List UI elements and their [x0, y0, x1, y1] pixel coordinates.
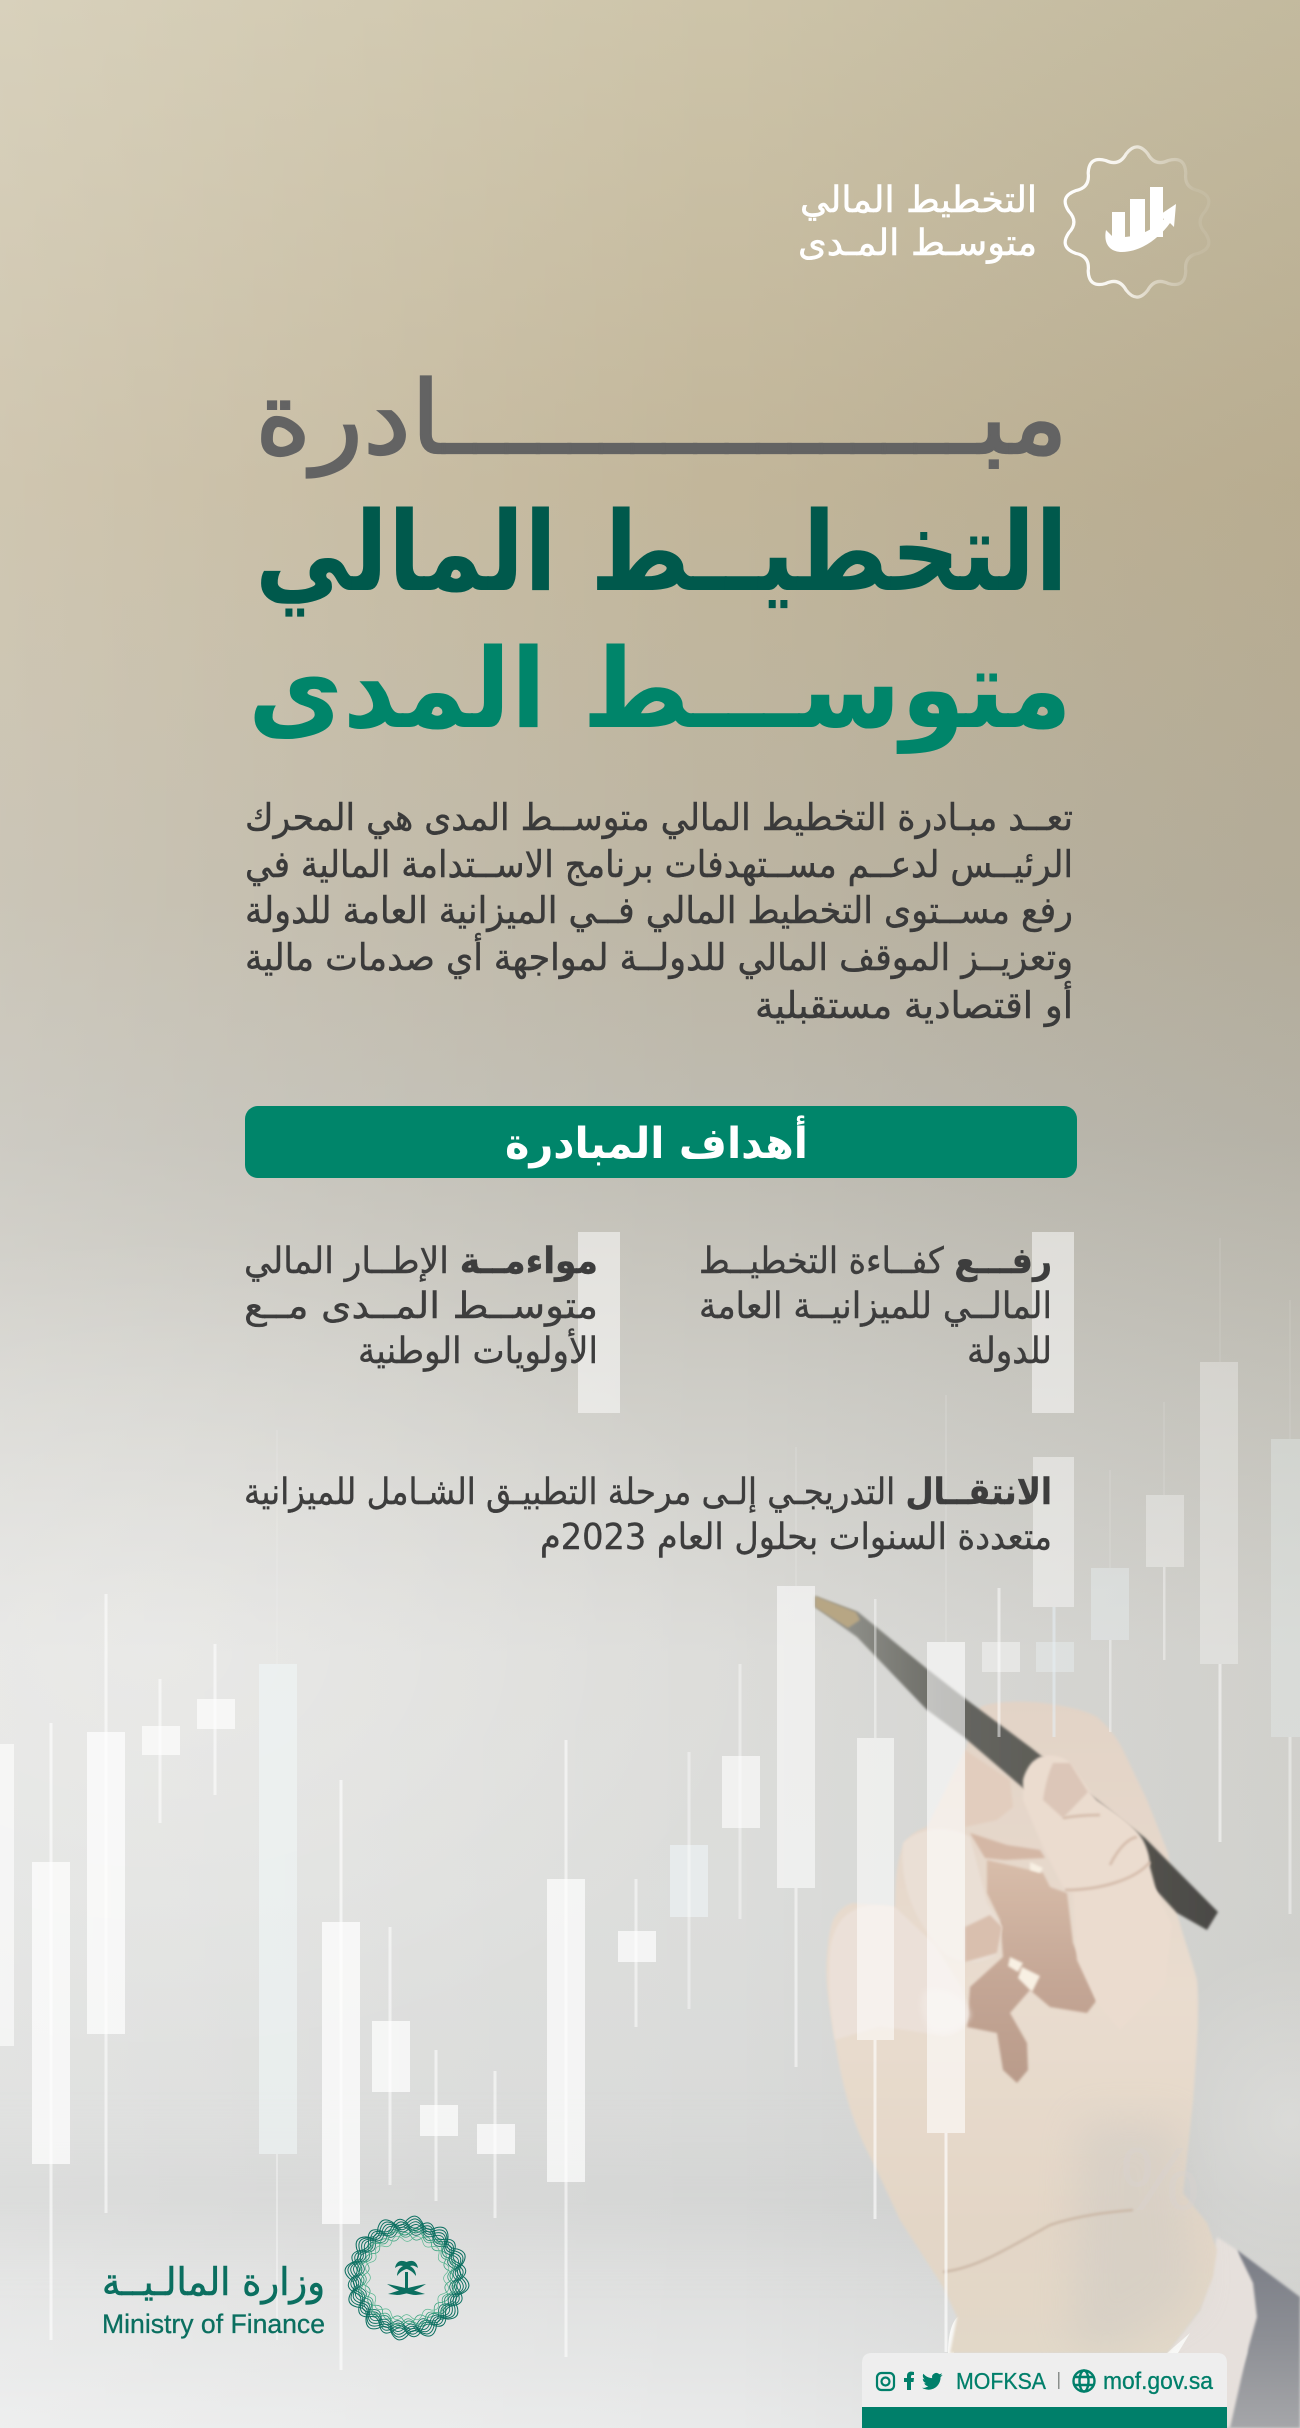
- second finger segment behind the pen: [965, 1750, 1013, 1827]
- pen: [815, 1596, 1218, 1930]
- title line 2: التخطيــط المالي: [255, 488, 1068, 617]
- emblem rings: [335, 2206, 479, 2350]
- header title: [798, 180, 1037, 264]
- goal: gradual transition: الانتقــال التدريجـي إلـى مرحلة التطبيـق الشـامل للميزانية: [244, 1472, 1052, 1513]
- emblem palm and swords: [387, 2261, 426, 2295]
- ministry name arabic: وزارة المالـيــة: [102, 2260, 325, 2305]
- goal: gradual transition: متعددة السنوات بحلول العام 2023م: [540, 1517, 1052, 1558]
- footer contact card: [862, 2353, 1227, 2428]
- goal: raise efficiency: رفـــع كفــاءة التخطيــط: [699, 1241, 1052, 1282]
- thumb creases: [1063, 1815, 1150, 1890]
- separator: [1058, 2372, 1060, 2389]
- index fingernail: [965, 1915, 1002, 1962]
- candlestick chart background: [0, 1232, 1300, 2370]
- intro paragraph: الرئيــس لدعــم مســتهدفات برنامج الاســتدامة المالية في: [245, 843, 1073, 886]
- goal: raise efficiency: للدولة: [967, 1331, 1052, 1372]
- hand shape: [827, 1702, 1217, 2353]
- ministry name english: Ministry of Finance: [102, 2309, 325, 2339]
- main title: [248, 359, 1072, 754]
- photo: hand holding a pen: [815, 1596, 1300, 2428]
- intro paragraph: تعــد مبـادرة التخطيط المالي متوســط المدى هي المحرك: [245, 796, 1073, 839]
- palm shadow: [967, 1860, 1097, 2083]
- goal: align framework: متوســط المــدى مــع: [244, 1286, 598, 1327]
- middle finger: [829, 1905, 968, 2040]
- icon: globe: [1074, 2370, 1094, 2392]
- wrist crease: [943, 2210, 1133, 2272]
- badge outline: [1065, 147, 1209, 297]
- intro paragraph: وتعزيــز الموقف المالي للدولــة لمواجهة أي صدمات مالية: [245, 933, 1073, 979]
- title line 1: مبـــــــــــــــــادرة: [255, 359, 1068, 478]
- section banner: initiative goals: أهداف المبادرة: [505, 1115, 808, 1169]
- goal: align framework: [244, 1241, 598, 1372]
- cuff highlight: [948, 2316, 1190, 2353]
- icon: twitter: [922, 2373, 943, 2390]
- index fingertip: [902, 1829, 1002, 1962]
- thumb: [1023, 1755, 1172, 2030]
- light spots through the fingers: [1008, 1862, 1043, 1992]
- card background: [862, 2353, 1227, 2408]
- logo: ministry of finance: [102, 2206, 479, 2350]
- intro paragraph: أو اقتصادية مستقبلية: [755, 981, 1073, 1027]
- finger shadow: [970, 1833, 1045, 1860]
- faint percent signs: %: [1120, 2130, 1200, 2230]
- header title: متوسـط المـدى: [798, 223, 1037, 264]
- pen nib: [815, 1596, 860, 1628]
- header title: التخطيط المالي: [800, 180, 1037, 221]
- title line 3: متوســـط المدى: [248, 625, 1072, 754]
- suit sleeve: [1220, 2250, 1300, 2428]
- middle fingertip highlight: [921, 1989, 970, 2032]
- goal: gradual transition: [244, 1472, 1052, 1558]
- icon: instagram: [877, 2373, 894, 2390]
- green bar: [862, 2407, 1227, 2428]
- wrist grey overlay: [1070, 2120, 1195, 2350]
- intro paragraph: [245, 796, 1073, 1027]
- goal: align framework: مواءمــة الإطــار المالي: [244, 1241, 598, 1282]
- icon: facebook: [904, 2372, 914, 2390]
- header logo: medium term fiscal planning: [798, 147, 1209, 297]
- intro paragraph: رفع مســتوى التخطيط المالي فــي الميزانية العامة للدولة: [245, 889, 1073, 932]
- shirt cuff: [1140, 2237, 1257, 2428]
- badge chart icon: [1105, 187, 1176, 252]
- thumbnail: [1043, 1763, 1088, 1818]
- goal: raise efficiency: المالــي للميزانيــة العامة: [699, 1286, 1052, 1327]
- goal: align framework: الأولويات الوطنية: [358, 1328, 598, 1372]
- handle text: MOFKSA: [956, 2368, 1047, 2394]
- section banner: initiative goals: [245, 1106, 1077, 1178]
- website text: mof.gov.sa: [1103, 2368, 1214, 2395]
- goal: raise efficiency: [699, 1241, 1052, 1372]
